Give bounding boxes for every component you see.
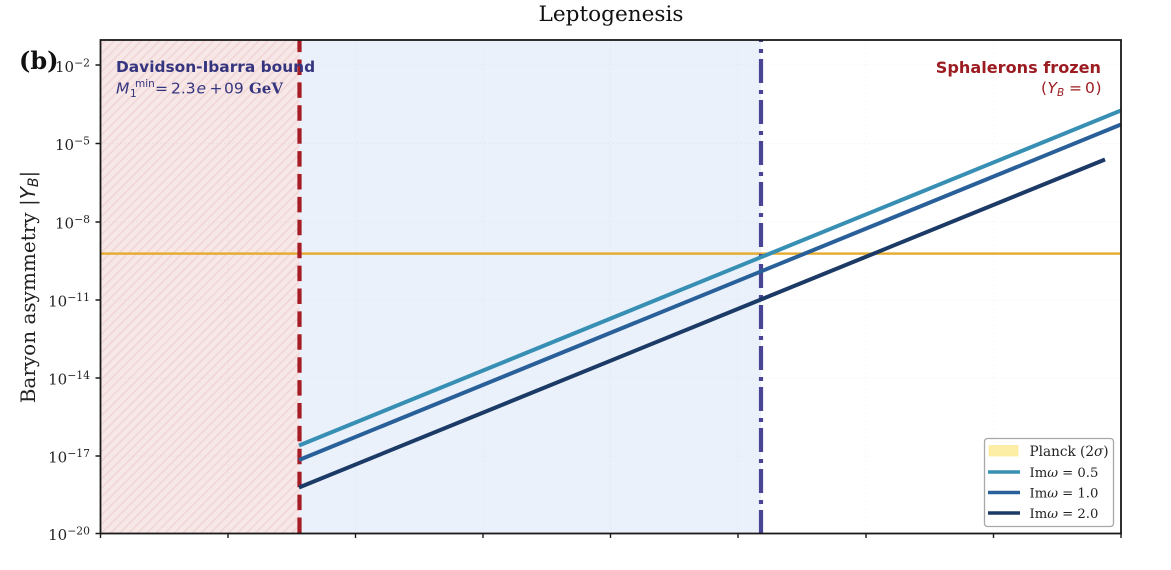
legend: Planck: Planck (2σ) (1030, 444, 1109, 460)
y axis ticks and labels (48, 56, 100, 544)
annotation: Davidson-Ibarra bound: min (135, 78, 155, 90)
y axis ticks and labels: −5 (74, 134, 90, 148)
y axis ticks and labels: −14 (67, 369, 90, 382)
sphaleron freeze-out line (759, 18, 763, 533)
legend: Im omega 2.0: Imω = 2.0 (1030, 507, 1098, 522)
annotation: Sphalerons frozen: B (1057, 87, 1064, 99)
annotation: Davidson-Ibarra bound: M (116, 80, 129, 98)
y axis ticks and labels: −17 (67, 447, 90, 460)
y axis ticks and labels: −20 (67, 524, 90, 538)
y axis ticks and labels: 10 (55, 214, 74, 232)
panel label: (b) (19, 46, 58, 75)
annotation: Sphalerons frozen: Sphalerons frozen (936, 58, 1101, 77)
legend (984, 438, 1114, 526)
y axis ticks and labels: −2 (74, 56, 90, 70)
y axis ticks and labels: −11 (67, 291, 90, 304)
annotation: Sphalerons frozen: ( (1041, 79, 1047, 97)
y axis ticks and labels: 10 (48, 448, 67, 466)
Davidson-Ibarra vertical line (297, 37, 302, 533)
annotation: Sphalerons frozen: 0 (1085, 79, 1095, 97)
y axis ticks and labels: 10 (48, 526, 67, 544)
y axis title: B (26, 177, 42, 187)
legend: Im omega 0.5: Imω = 0.5 (1030, 466, 1098, 481)
x axis ticks (100, 533, 1121, 538)
Planck band line (100, 252, 1121, 255)
curve: Im omega 2.0 (299, 160, 1105, 488)
y axis ticks and labels: 10 (48, 370, 67, 388)
y axis title: Baryon asymmetry |Y (16, 187, 40, 403)
title: Leptogenesis (539, 2, 683, 27)
annotation: Sphalerons frozen: ) (1096, 79, 1102, 97)
allowed region: blue band (300, 40, 761, 533)
y axis title: | (16, 171, 41, 177)
annotation: Davidson-Ibarra bound: e (196, 80, 206, 98)
y axis ticks and labels: 10 (48, 292, 67, 310)
y axis ticks and labels: 10 (55, 58, 74, 76)
annotation: Davidson-Ibarra bound (116, 58, 315, 100)
annotation: Davidson-Ibarra bound: + (210, 80, 222, 98)
curves (299, 110, 1121, 488)
annotation: Davidson-Ibarra bound: 09 (224, 80, 244, 98)
panel: plot area (100, 18, 1121, 534)
annotation: Davidson-Ibarra bound: GeV (249, 80, 283, 98)
annotation: Sphalerons frozen (936, 58, 1102, 99)
annotation: Davidson-Ibarra bound: = (155, 80, 168, 98)
excluded region: Davidson-Ibarra hatched (100, 40, 300, 533)
annotation: Sphalerons frozen: Y (1048, 79, 1058, 97)
y axis ticks and labels: 10 (55, 136, 74, 154)
annotation: Davidson-Ibarra bound: Davidson-Ibarra bound (116, 58, 315, 76)
curve: Im omega 1.0 (299, 124, 1121, 460)
y axis ticks and labels: −8 (74, 213, 90, 226)
annotation: Sphalerons frozen: = (1069, 79, 1082, 97)
annotation: Davidson-Ibarra bound: 1 (130, 88, 137, 100)
annotation: Davidson-Ibarra bound: 2.3 (171, 80, 196, 98)
legend: Im omega 1.0: Imω = 1.0 (1030, 486, 1098, 502)
curve: Im omega 0.5 (299, 110, 1121, 446)
plot frame (100, 40, 1121, 534)
